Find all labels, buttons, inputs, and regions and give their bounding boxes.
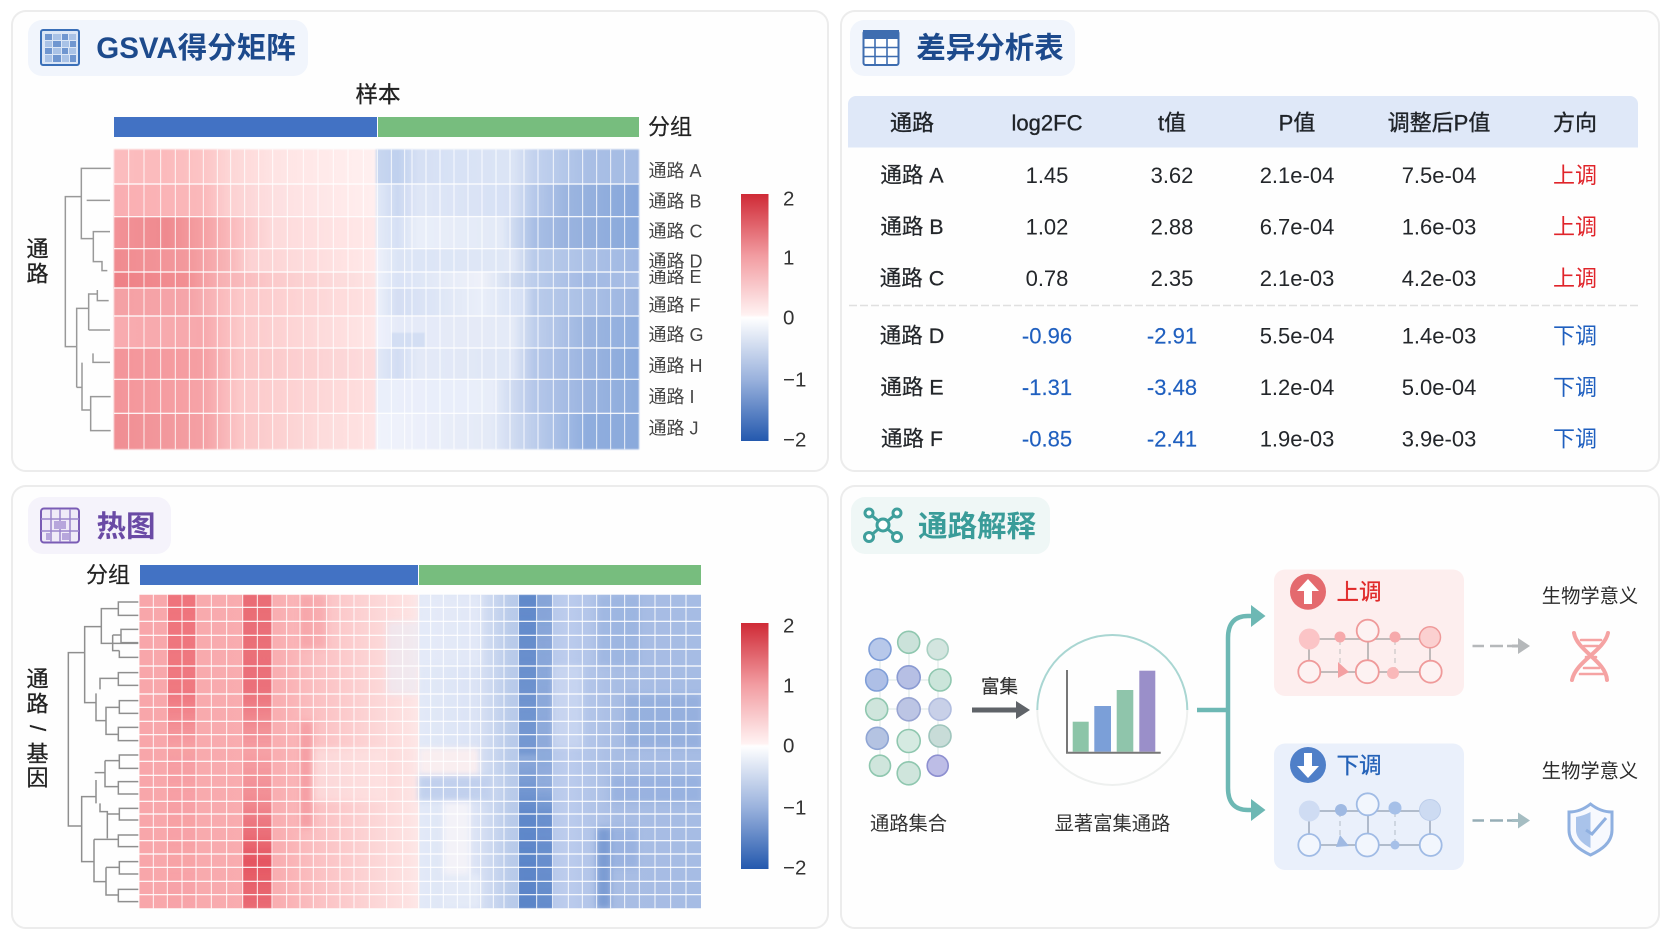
row labels: 通路 A: [648, 161, 702, 181]
table header: log2FC: [1012, 110, 1083, 136]
table row: pathway B: 6.7e-04: [1260, 214, 1334, 240]
heatmap: pathways by samples: [114, 149, 639, 449]
group annotation bar: [140, 565, 701, 585]
side label: pathways: [26, 236, 49, 286]
table header: 调整后P值: [1388, 110, 1490, 136]
side label: pathway / gene: 通: [26, 666, 49, 692]
table row: pathway A: 3.62: [1151, 163, 1193, 188]
row labels: 通路 G: [648, 325, 704, 345]
table row: pathway D: 5.5e-04: [1260, 324, 1334, 348]
row labels: 通路 D: [648, 252, 703, 272]
caption: significantly enriched pathways: 显著富集通路: [1055, 813, 1170, 835]
table row: pathway B: 2.88: [1151, 214, 1193, 240]
heading: pathway interpretation: [851, 497, 1050, 554]
dendrogram: pathways: [65, 168, 111, 431]
table row: pathway C: 0.78: [1026, 266, 1068, 291]
table row: pathway E: -1.31: [1022, 375, 1072, 400]
icon: down arrow: [1290, 747, 1326, 783]
pathway network: down: [1298, 793, 1442, 856]
icon: DNA: [1572, 633, 1608, 680]
side label: pathway / gene: [25, 666, 50, 790]
table row: pathway C: [880, 266, 1597, 291]
dashed arrow: up to meaning: [1472, 638, 1530, 654]
colour legend: [741, 614, 806, 880]
colour legend: [741, 188, 806, 452]
dashed arrow: down to meaning: [1472, 812, 1530, 828]
colour legend: −1: [783, 368, 806, 392]
table row: pathway A: 通路 A: [880, 164, 944, 188]
table row: pathway E: 1.2e-04: [1260, 375, 1334, 400]
table row: pathway E: 5.0e-04: [1402, 375, 1476, 400]
row labels: 通路 E: [648, 267, 702, 287]
label: enrichment: 富集: [981, 676, 1018, 697]
table row: pathway F: [881, 426, 1597, 452]
heading text: 热图: [96, 510, 156, 544]
table row: pathway A: 1.45: [1026, 163, 1068, 188]
text: biological meaning (up): 生物学意义: [1542, 586, 1638, 608]
text: biological meaning (down): 生物学意义: [1542, 760, 1638, 782]
side label: pathways: 通: [26, 236, 49, 262]
row labels: [648, 161, 704, 438]
table row: pathway D: 通路 D: [880, 324, 944, 348]
panel: heatmap: [12, 486, 828, 928]
heading: differential table: [850, 20, 1075, 76]
table row: pathway F: 通路 F: [881, 427, 943, 451]
sample axis label: 样本: [355, 82, 401, 108]
table row: pathway D: 下调: [1553, 324, 1597, 348]
heatmap: pathway and gene: [139, 595, 701, 908]
table row: pathway C: 2.35: [1151, 266, 1193, 291]
icon: matrix grid: [41, 30, 79, 65]
bar chart: [1067, 670, 1161, 753]
table row: pathway F: 下调: [1553, 426, 1597, 452]
panel: pathway interpretation: [841, 486, 1659, 928]
group annotation bar: [114, 117, 639, 137]
heading text: 差异分析表: [916, 32, 1064, 65]
colour legend: 0: [783, 734, 794, 758]
colour legend: 1: [783, 674, 794, 698]
heading text: GSVA得分矩阵: [96, 32, 296, 65]
table row: pathway F: -0.85: [1022, 426, 1072, 452]
heading: GSVA score matrix: [28, 20, 308, 76]
icon: heatmap grid: [41, 508, 79, 542]
table row: pathway F: 3.9e-03: [1402, 426, 1476, 452]
colour legend: −2: [783, 856, 806, 880]
table row: pathway B: 通路 B: [880, 215, 944, 239]
table row: pathway B: [880, 214, 1597, 240]
table row: pathway A: 上调: [1553, 163, 1597, 188]
side label: pathway / gene: /: [25, 725, 50, 732]
table row: pathway F: 1.9e-03: [1260, 426, 1334, 452]
group label: 分组: [648, 114, 692, 140]
group label: 分组: [86, 562, 130, 588]
panel: differential analysis table: [841, 11, 1659, 471]
arrow: enrichment: [972, 701, 1030, 719]
table row: pathway D: [880, 324, 1597, 348]
table header: [848, 96, 1638, 148]
icon: network: [864, 509, 902, 542]
side label: pathway / gene: 因: [26, 766, 49, 790]
table row: pathway C: 通路 C: [880, 266, 944, 290]
table row: pathway E: -3.48: [1147, 375, 1197, 400]
table row: pathway D: -2.91: [1147, 324, 1197, 348]
icon: up arrow: [1290, 574, 1326, 610]
row labels: 通路 I: [648, 387, 695, 407]
table header: 通路: [890, 110, 934, 136]
card: up-regulated: [1274, 570, 1464, 696]
table row: pathway E: 下调: [1553, 375, 1597, 400]
label: up: 上调: [1336, 580, 1382, 605]
panel: GSVA score matrix: [12, 11, 828, 471]
icon: table: [863, 30, 899, 65]
card: down-regulated: [1274, 744, 1464, 870]
colour legend: 2: [783, 614, 794, 638]
colour legend: 2: [783, 188, 794, 210]
branching teal arrows: [1197, 605, 1266, 821]
table row: pathway A: [880, 163, 1597, 188]
table row: pathway B: 1.02: [1026, 214, 1068, 240]
caption: pathway set: 通路集合: [870, 813, 947, 835]
table row: pathway B: 1.6e-03: [1402, 214, 1476, 240]
row labels: 通路 J: [648, 418, 699, 438]
table row: pathway D: -0.96: [1022, 324, 1072, 348]
table header: 方向: [1553, 110, 1597, 136]
table row: pathway F: -2.41: [1147, 426, 1197, 452]
side label: pathway / gene: 基: [26, 742, 49, 766]
table row: pathway C: 上调: [1553, 266, 1597, 291]
table row: pathway D: 1.4e-03: [1402, 324, 1476, 348]
table row: pathway C: 2.1e-03: [1260, 266, 1334, 291]
heading text: 通路解释: [918, 510, 1036, 544]
colour legend: 0: [783, 306, 794, 330]
table row: pathway E: 通路 E: [880, 376, 944, 400]
colour legend: −2: [783, 428, 806, 452]
table row: pathway A: 2.1e-04: [1260, 163, 1334, 188]
row labels: 通路 H: [648, 356, 702, 376]
table row: pathway A: 7.5e-04: [1402, 163, 1476, 188]
table header: P值: [1279, 110, 1315, 136]
side label: pathways: 路: [26, 262, 49, 286]
icon: shield: [1569, 804, 1612, 855]
table header: t值: [1158, 110, 1186, 136]
colour legend: 1: [783, 246, 794, 270]
side label: pathway / gene: 路: [26, 692, 49, 716]
dendrogram: pathway and gene: [68, 602, 138, 902]
colour legend: −1: [783, 796, 806, 820]
row labels: 通路 C: [648, 222, 703, 242]
enriched pathways circle with bar chart: [1037, 635, 1187, 785]
table row: pathway C: 4.2e-03: [1402, 266, 1476, 291]
pathway set nodes: [866, 631, 951, 785]
heading: heatmap: [28, 497, 171, 554]
table row: pathway E: [880, 375, 1597, 400]
row labels: 通路 F: [648, 296, 701, 316]
pathway network: up: [1298, 620, 1442, 683]
row labels: 通路 B: [648, 192, 702, 212]
label: down: 下调: [1336, 754, 1382, 778]
table row: pathway B: 上调: [1553, 214, 1597, 240]
